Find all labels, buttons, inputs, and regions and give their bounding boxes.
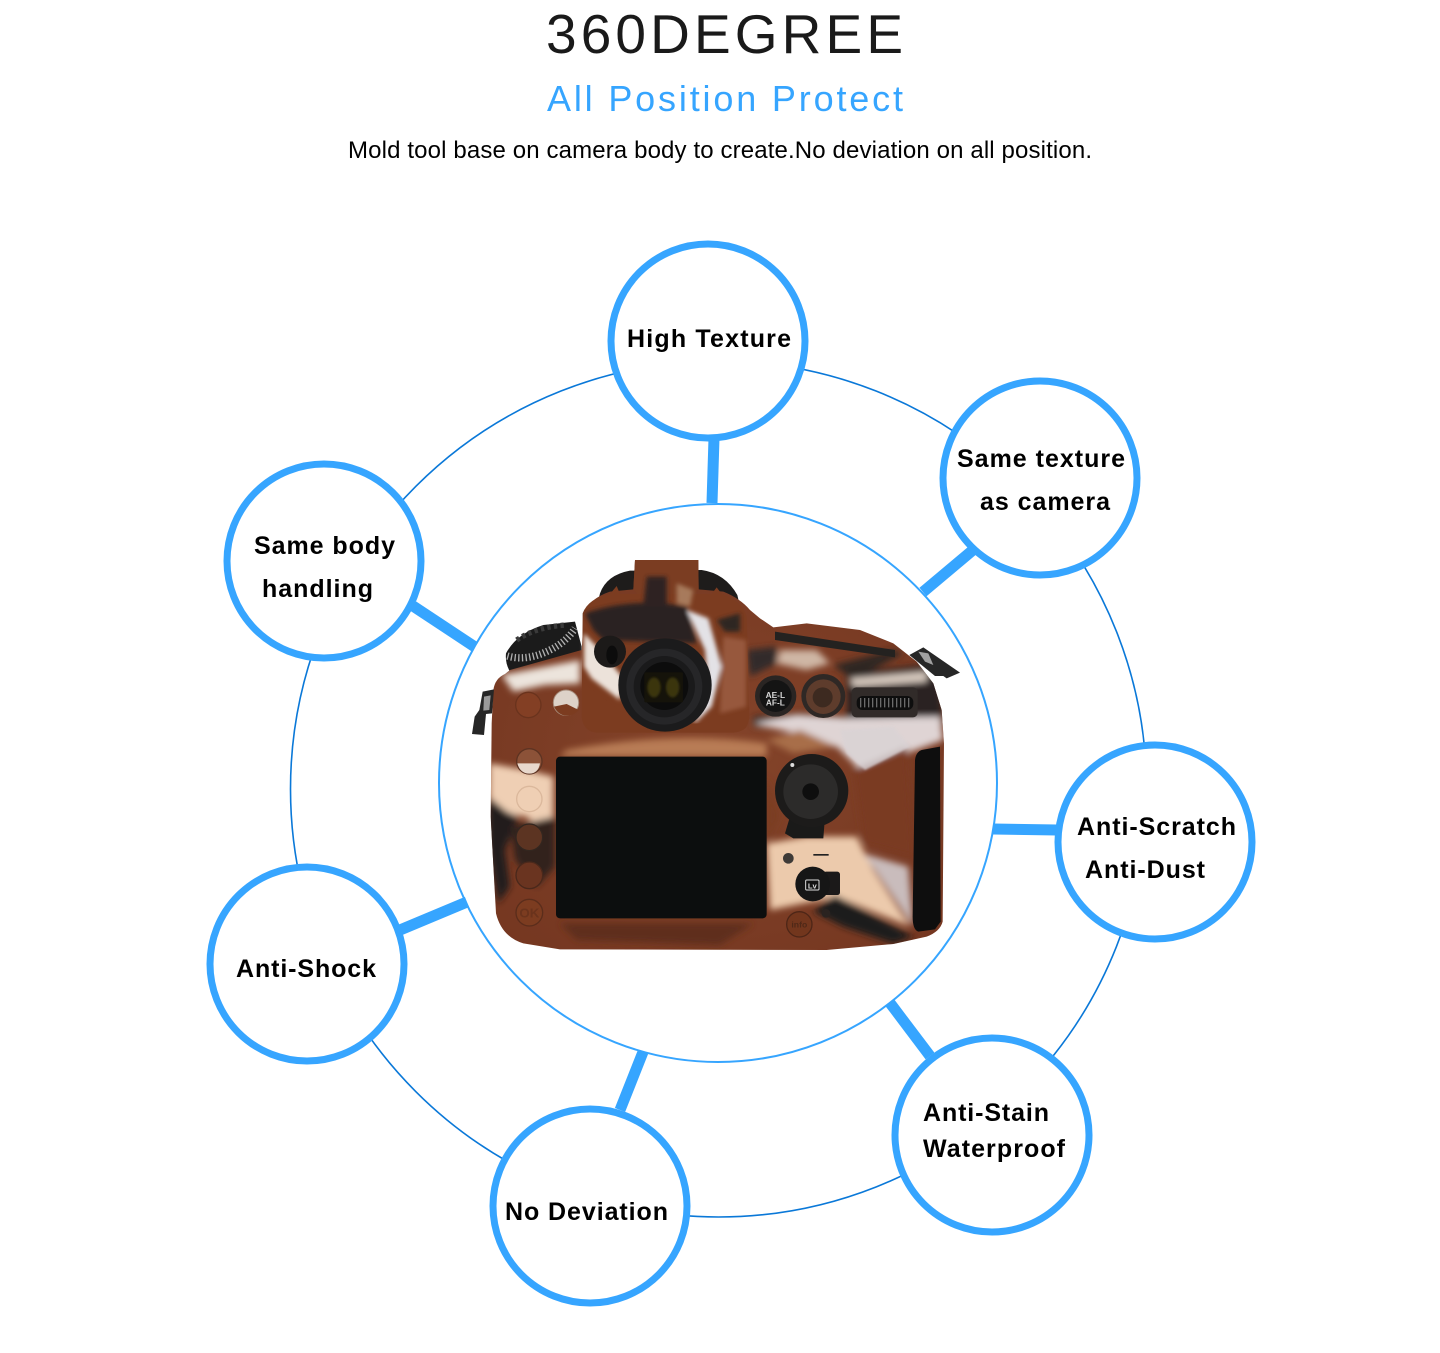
bubble: Anti-Shock (210, 867, 404, 1061)
subtitle: All Position Protect (547, 78, 903, 119)
small indicator (783, 853, 829, 864)
multi selector (775, 754, 848, 838)
bubble: Anti-Scratch Anti-Dust: Anti-Dust (1085, 856, 1206, 884)
case body (487, 557, 950, 953)
bubble: Same texture as camera: as camera (980, 488, 1111, 516)
hot shoe cover (633, 560, 699, 605)
bubble: Same body handling (227, 464, 421, 658)
right strap lug (909, 647, 960, 678)
left column buttons (516, 749, 543, 926)
bubble: Same body handling: handling (262, 575, 373, 603)
bubble: High Texture (611, 244, 805, 438)
connector spokes (400, 438, 1057, 1110)
bubble: Anti-Shock: Anti-Shock (236, 955, 376, 983)
inner circle (439, 504, 997, 1062)
AF-ON button (801, 674, 845, 718)
bubble: Anti-Stain Waterproof: Waterproof (923, 1135, 1066, 1163)
LCD screen (556, 757, 767, 918)
bubble: No Deviation: No Deviation (505, 1198, 668, 1226)
prism box (582, 577, 749, 733)
camera with brown silicone case (472, 557, 960, 953)
upper-left buttons (516, 690, 579, 718)
live view switch (795, 867, 840, 901)
diopter knob (594, 636, 626, 668)
bubble: Anti-Scratch Anti-Dust: Anti-Scratch (1077, 813, 1236, 841)
eyepiece (618, 638, 712, 732)
AE-L AF-L button: AF-L (766, 698, 785, 708)
bubble: Anti-Scratch Anti-Dust (1058, 745, 1252, 939)
top plate slit (775, 632, 895, 657)
live view switch: Lv (808, 882, 818, 891)
bubble: Anti-Stain Waterproof (895, 1038, 1089, 1232)
bubble: Same texture as camera (943, 381, 1137, 575)
info button (787, 909, 830, 937)
left mode dial (506, 622, 582, 672)
description: Mold tool base on camera body to create.No deviation on all position. (348, 137, 1092, 164)
command wheel (852, 687, 918, 717)
title: 360DEGREE (546, 3, 903, 65)
viewfinder hump behind case (597, 570, 740, 607)
bubble: Same body handling: Same body (254, 532, 395, 560)
left strap lug (472, 689, 494, 735)
bubble: Same texture as camera: Same texture (957, 445, 1125, 473)
infographic (206, 14, 1256, 1306)
AE-L AF-L button (755, 675, 796, 717)
white speckled streak (846, 744, 909, 771)
bubble: Anti-Stain Waterproof: Anti-Stain (923, 1099, 1049, 1127)
info button: info (791, 920, 807, 930)
bubble: High Texture: High Texture (627, 325, 791, 353)
grip window (913, 747, 941, 932)
bubble: No Deviation (493, 1109, 687, 1303)
left column buttons: OK (519, 906, 540, 921)
outer orbit ring (290, 361, 1146, 1217)
AE-L AF-L button: AE-L (766, 690, 785, 700)
